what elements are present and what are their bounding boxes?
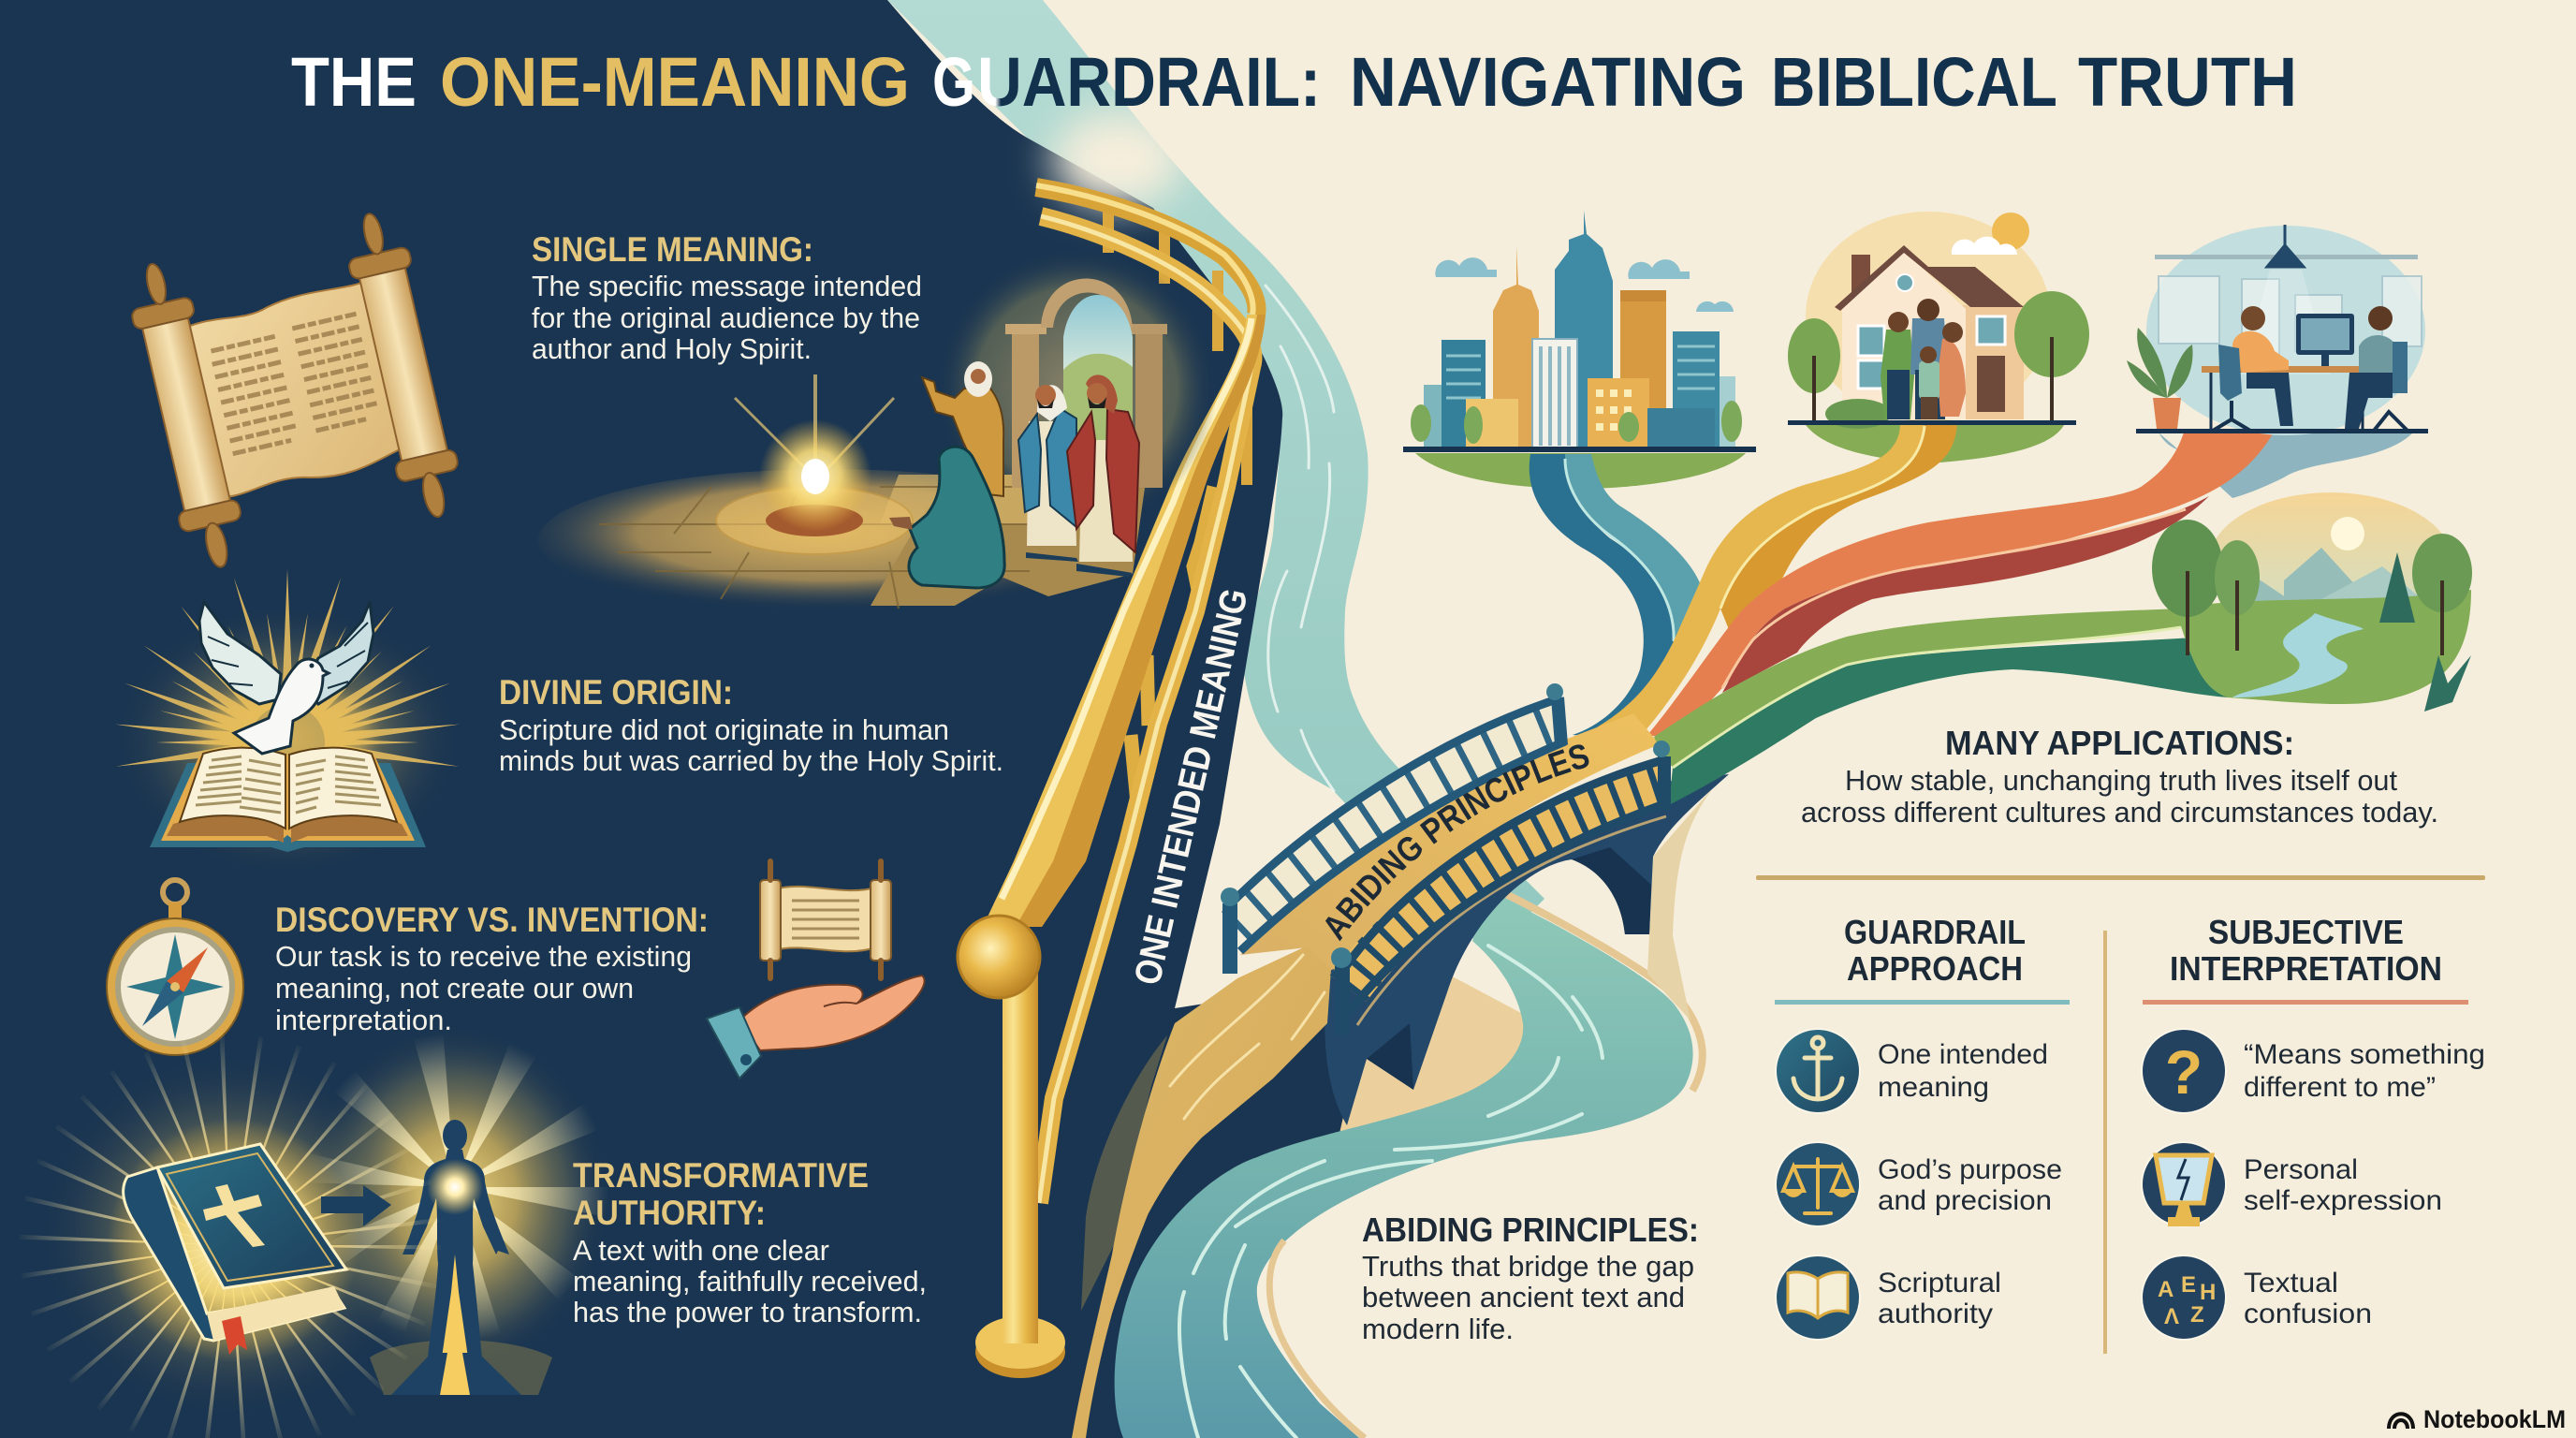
icon: scrambled letters: E: [2181, 1272, 2196, 1298]
figure: man in red: [1067, 374, 1139, 577]
title: G: [932, 43, 975, 121]
icon: scrambled letters: H: [2200, 1280, 2216, 1305]
text: discovery vs invention: [275, 901, 709, 1036]
icon: dove and open book: [114, 569, 461, 875]
item: god's purpose: God’s purpose: [1878, 1154, 2062, 1185]
title: TRUTH: [2078, 43, 2297, 121]
tan road: [1072, 946, 1331, 1438]
title: THE: [291, 43, 417, 121]
item: personal self-expression: self-expression: [2244, 1185, 2442, 1216]
icon: scrambled letters: Z: [2190, 1302, 2204, 1328]
road: orange (work): [1647, 433, 2274, 740]
text: single meaning: author and Holy Spirit.: [532, 332, 812, 365]
text: transformative authority: meaning, faithfully received,: [573, 1265, 927, 1298]
column heading: [1844, 913, 2026, 988]
icon: small scroll received: [760, 861, 891, 978]
item: personal self-expression: Personal: [2244, 1154, 2358, 1185]
illustration: ancient scene with light: [538, 248, 1217, 611]
text: transformative authority: [573, 1156, 927, 1328]
text: divine origin: [499, 673, 1003, 777]
icon: scrambled letters: [2142, 1255, 2226, 1340]
text: divine origin: Scripture did not originate in human: [499, 713, 949, 746]
text: transformative authority: A text with one clear: [573, 1234, 829, 1267]
icon: question mark: [2142, 1029, 2226, 1113]
text: many applications: How stable, unchanging truth lives itself out: [1845, 764, 2397, 797]
item: textual confusion: confusion: [2244, 1299, 2372, 1329]
illustration: nature: [2152, 492, 2472, 712]
item: scriptural authority: [1878, 1268, 2001, 1329]
text: discovery vs invention: Our task is to receive the existing: [275, 940, 692, 973]
item: textual confusion: Textual: [2244, 1268, 2338, 1299]
arrow: book to person: [321, 1185, 391, 1226]
soft transition haze: [1053, 112, 1184, 206]
column: guardrail approach: [1775, 913, 2070, 1340]
figure: man in blue: [1018, 385, 1078, 562]
guardrail base: [975, 1306, 1065, 1378]
title: [291, 43, 2297, 121]
bridge lower railing: [1331, 741, 1670, 1034]
column heading: [2170, 913, 2442, 988]
river current strokes: [1266, 286, 1334, 791]
item: means something different: different to me”: [2244, 1072, 2436, 1103]
title: BIBLICAL: [1771, 43, 2057, 121]
title: NAVIGATING: [1350, 43, 1746, 121]
text: single meaning: The specific message intended: [532, 270, 922, 302]
text: abiding principles: modern life.: [1362, 1313, 1514, 1345]
text: abiding principles: ABIDING PRINCIPLES:: [1362, 1211, 1699, 1249]
column heading: SUBJECTIVE: [2208, 913, 2404, 951]
text: discovery vs invention: meaning, not create our own: [275, 972, 634, 1005]
bank under bridge arch: [1339, 974, 1535, 1137]
column heading: APPROACH: [1847, 949, 2023, 988]
column divider: [2103, 931, 2107, 1354]
text: divine origin: DIVINE ORIGIN:: [499, 673, 733, 712]
icon: scrambled letters: A: [2158, 1277, 2174, 1302]
illustration: office: [2127, 225, 2428, 435]
item: textual confusion: [2244, 1268, 2372, 1329]
column: subjective interpretation: [2142, 913, 2485, 1340]
illustration: city: [1403, 211, 1756, 452]
road: green (nature): [1654, 609, 2228, 805]
icon: open hand: [707, 976, 925, 1078]
bridge upper railing: [1221, 683, 1565, 974]
item: means something different: “Means something: [2244, 1039, 2485, 1070]
bridge body and piers: [1325, 774, 1729, 1125]
item: god's purpose: [1878, 1154, 2062, 1216]
column heading: INTERPRETATION: [2170, 949, 2442, 988]
icon: anchor: [1776, 1029, 1860, 1113]
section divider: [1756, 875, 2485, 880]
title: UARDRAIL:: [977, 43, 1321, 121]
guardrail label: ONE INTENDED MEANING: [1127, 585, 1256, 989]
road: yellow (family): [1554, 423, 1957, 749]
icon: question mark: ?: [2165, 1037, 2203, 1107]
text: abiding principles: Truths that bridge the gap: [1362, 1250, 1694, 1283]
icon: glowing person: [300, 1025, 609, 1395]
figure: kneeling woman: [889, 447, 1004, 588]
text: single meaning: for the original audience by the: [532, 301, 920, 334]
item: scriptural authority: Scriptural: [1878, 1268, 2001, 1299]
road: blue (city): [1530, 454, 1701, 740]
item: one intended meaning: meaning: [1878, 1072, 1989, 1103]
illustration: family home: [1788, 212, 2089, 429]
text: divine origin: minds but was carried by the Holy Spirit.: [499, 744, 1003, 777]
column heading: GUARDRAIL: [1844, 913, 2026, 951]
figure: standing teacher: [922, 361, 1003, 496]
floating ground islands: [1415, 425, 2413, 498]
item: one intended meaning: [1878, 1039, 2048, 1103]
text: discovery vs invention: interpretation.: [275, 1004, 452, 1036]
NotebookLM badge: NotebookLM: [2423, 1405, 2566, 1433]
text: many applications: MANY APPLICATIONS:: [1945, 724, 2294, 762]
text: abiding principles: [1362, 1211, 1699, 1345]
upper river: [887, 0, 1544, 955]
item: means something different: [2244, 1039, 2485, 1103]
text: transformative authority: TRANSFORMATIVE: [573, 1156, 869, 1195]
dark navy field: [0, 0, 1367, 1438]
text: single meaning: SINGLE MEANING:: [532, 230, 813, 269]
icon: broken mirror: [2142, 1142, 2226, 1226]
text: discovery vs invention: DISCOVERY VS. INVENTION:: [275, 901, 709, 939]
icon: scrambled letters: Λ: [2164, 1304, 2179, 1329]
item: personal self-expression: [2244, 1154, 2442, 1216]
text: transformative authority: AUTHORITY:: [573, 1194, 766, 1232]
icon: glowing book: [38, 1053, 422, 1418]
icon: parchment scroll: [122, 207, 469, 574]
item: scriptural authority: authority: [1878, 1299, 1993, 1329]
text: transformative authority: has the power to transform.: [573, 1296, 922, 1328]
text: abiding principles: between ancient text and: [1362, 1281, 1685, 1313]
text: single meaning: [532, 230, 922, 365]
gold guardrail: [983, 185, 1266, 1315]
icon: compass: [107, 880, 243, 1055]
text: many applications: [1801, 724, 2438, 829]
lower river: [1115, 888, 1703, 1438]
guardrail finial ball: [958, 916, 1040, 998]
item: one intended meaning: One intended: [1878, 1039, 2048, 1070]
bridge label: ABIDING PRINCIPLES: [1325, 744, 1589, 942]
text: many applications: across different cultures and circumstances today.: [1801, 796, 2438, 829]
bridge deck: [1240, 713, 1660, 970]
title: ONE-MEANING: [440, 43, 910, 121]
icon: open book: [1776, 1255, 1860, 1340]
icon: scales: [1776, 1142, 1860, 1226]
item: god's purpose: and precision: [1878, 1185, 2052, 1216]
tan road shadow: [1081, 1035, 1167, 1311]
